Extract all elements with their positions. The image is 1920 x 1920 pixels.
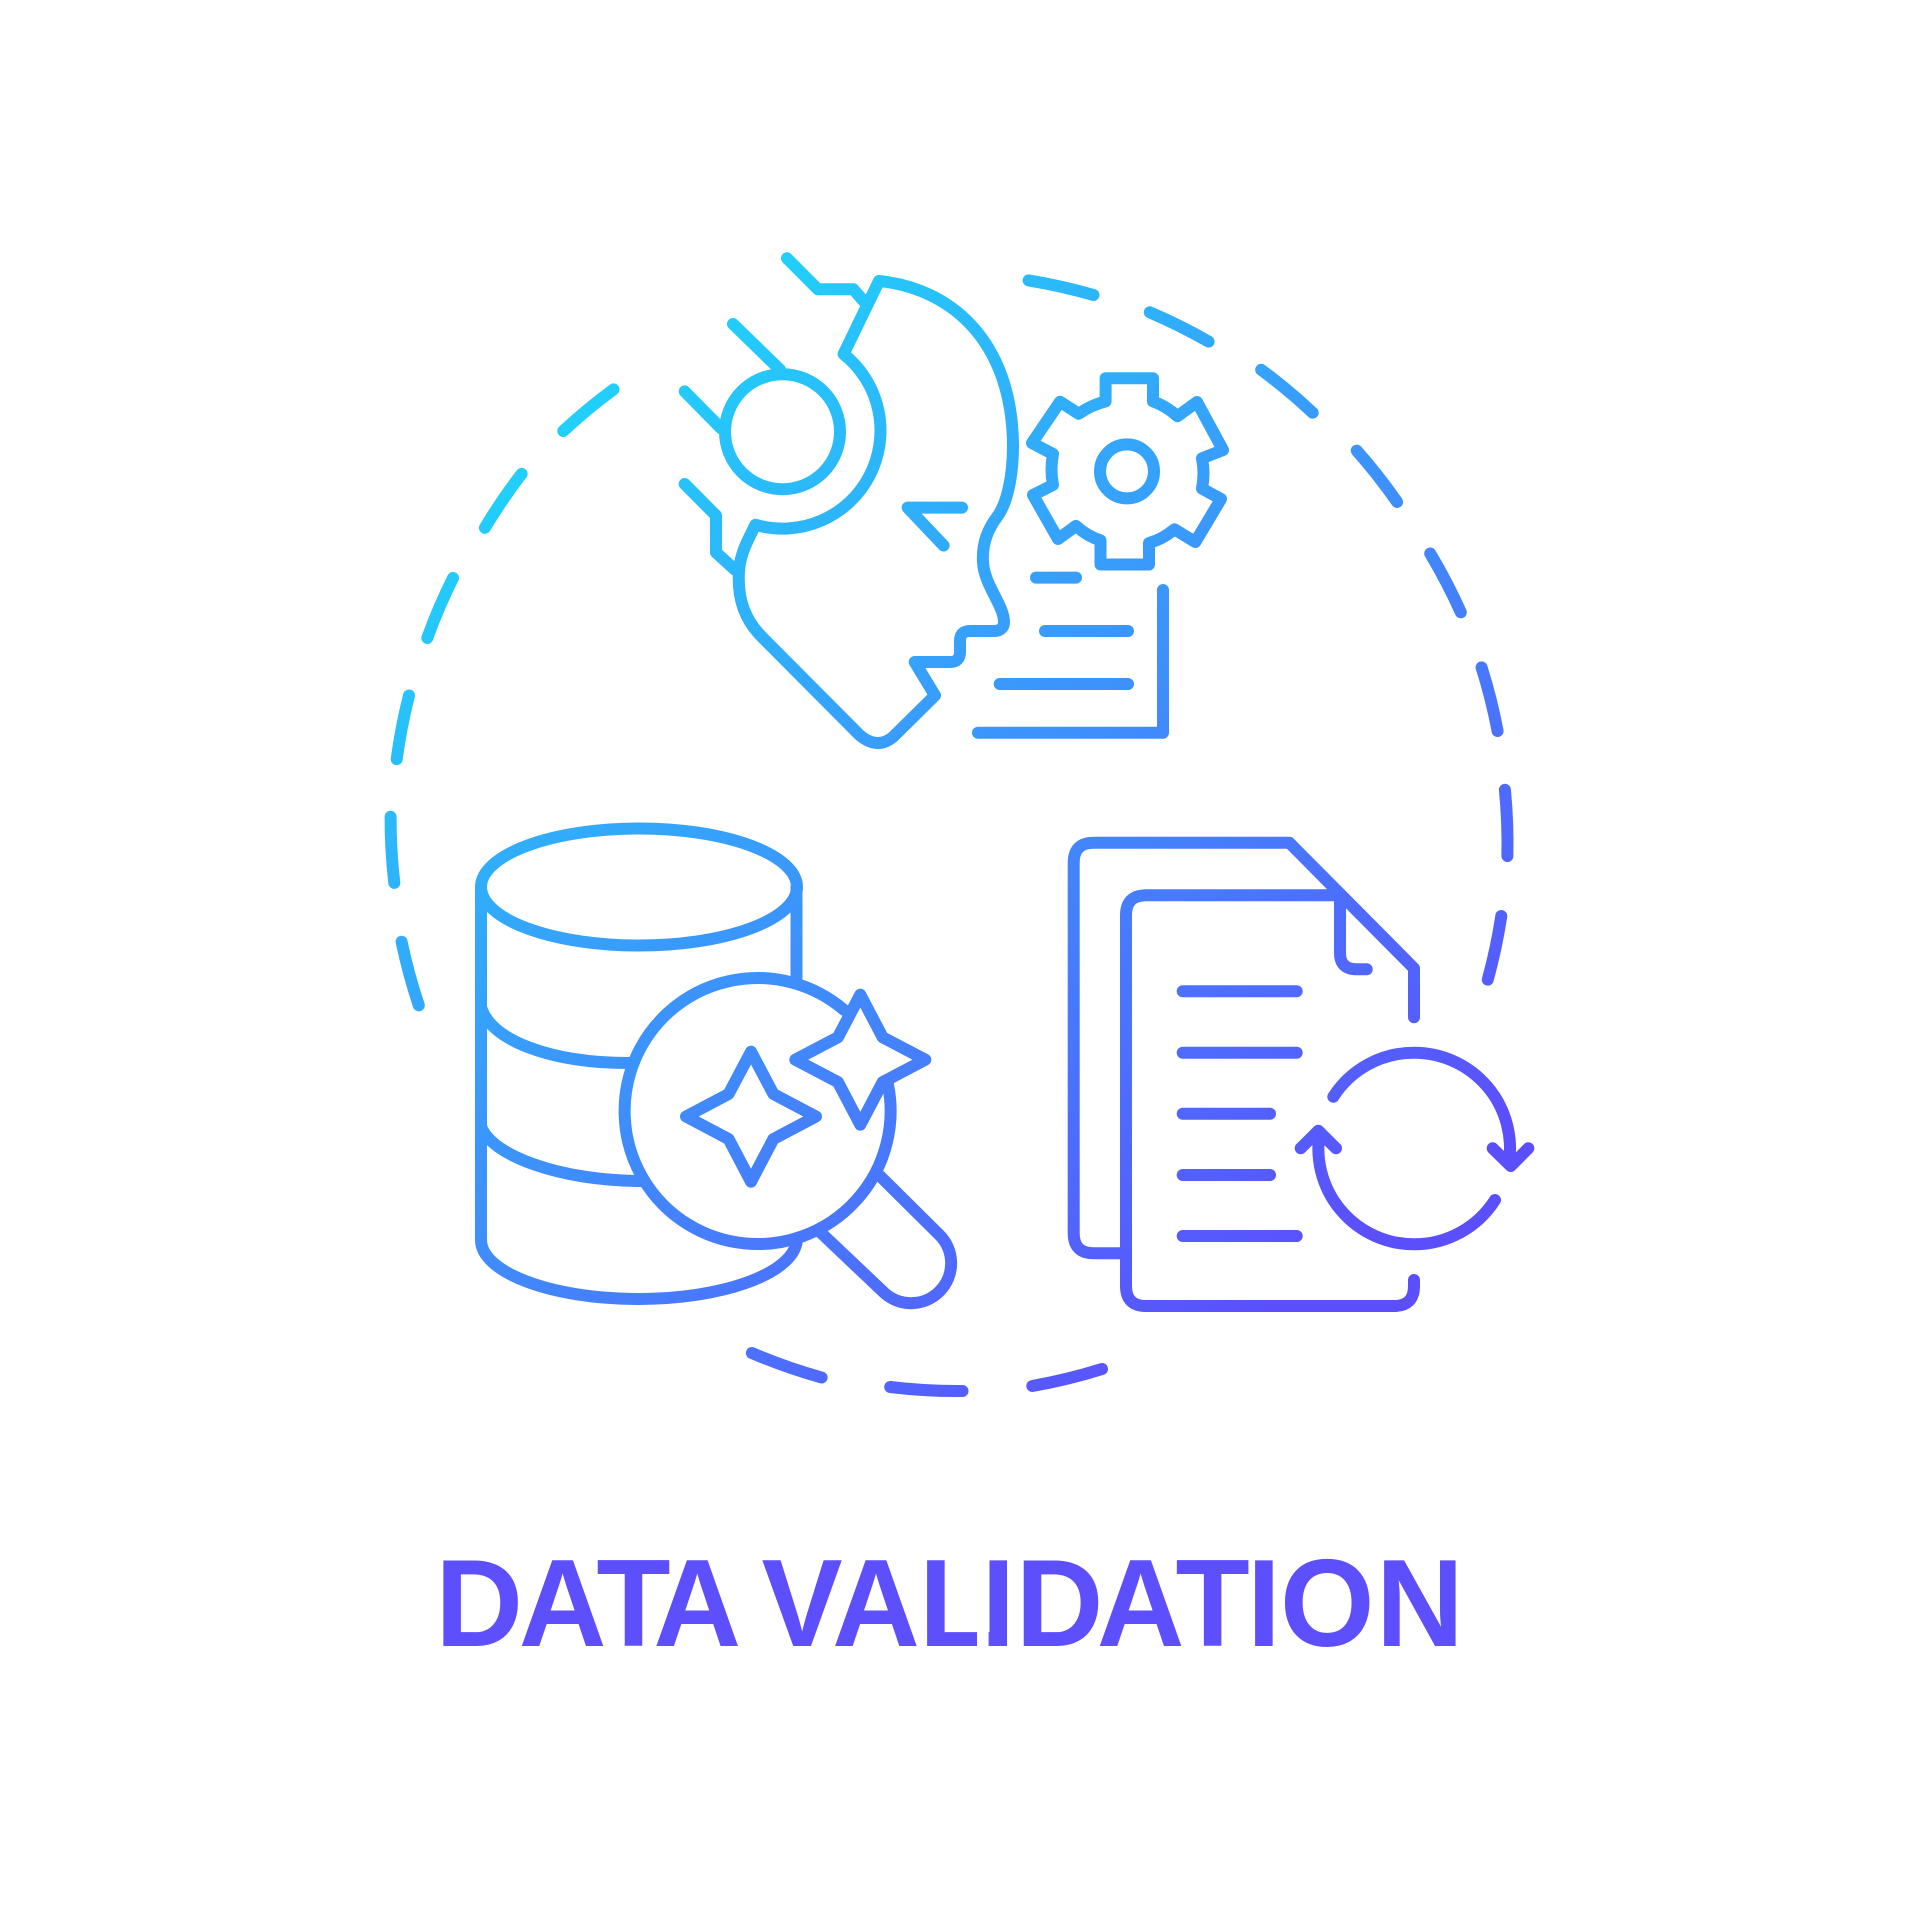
icon: documents with refresh arrows: [1074, 843, 1528, 1306]
eye: [908, 508, 962, 546]
circuit antennas: [685, 258, 863, 570]
text lines and corner frame: [978, 578, 1163, 733]
icon: gear: [1032, 378, 1223, 564]
lens: [625, 978, 891, 1244]
handle: [821, 1176, 951, 1303]
sparkle right: [795, 995, 925, 1125]
page fold: [1340, 895, 1367, 969]
icon: AI robot head: [685, 258, 1013, 743]
icon: database cylinder: [481, 828, 797, 1299]
page text lines: [1183, 991, 1297, 1236]
sparkle left: [686, 1052, 816, 1182]
dashed circle ring: [391, 280, 1508, 1391]
front page: [1126, 895, 1414, 1306]
back page: [1074, 843, 1414, 1253]
head outline: [739, 281, 1013, 743]
refresh arrow bottom: [1301, 1131, 1495, 1244]
refresh arrow top: [1333, 1053, 1528, 1166]
ear circle: [725, 374, 840, 489]
icon: magnifying glass with sparkles: [625, 978, 951, 1303]
title: DATA VALIDATION: [435, 1535, 1464, 1673]
